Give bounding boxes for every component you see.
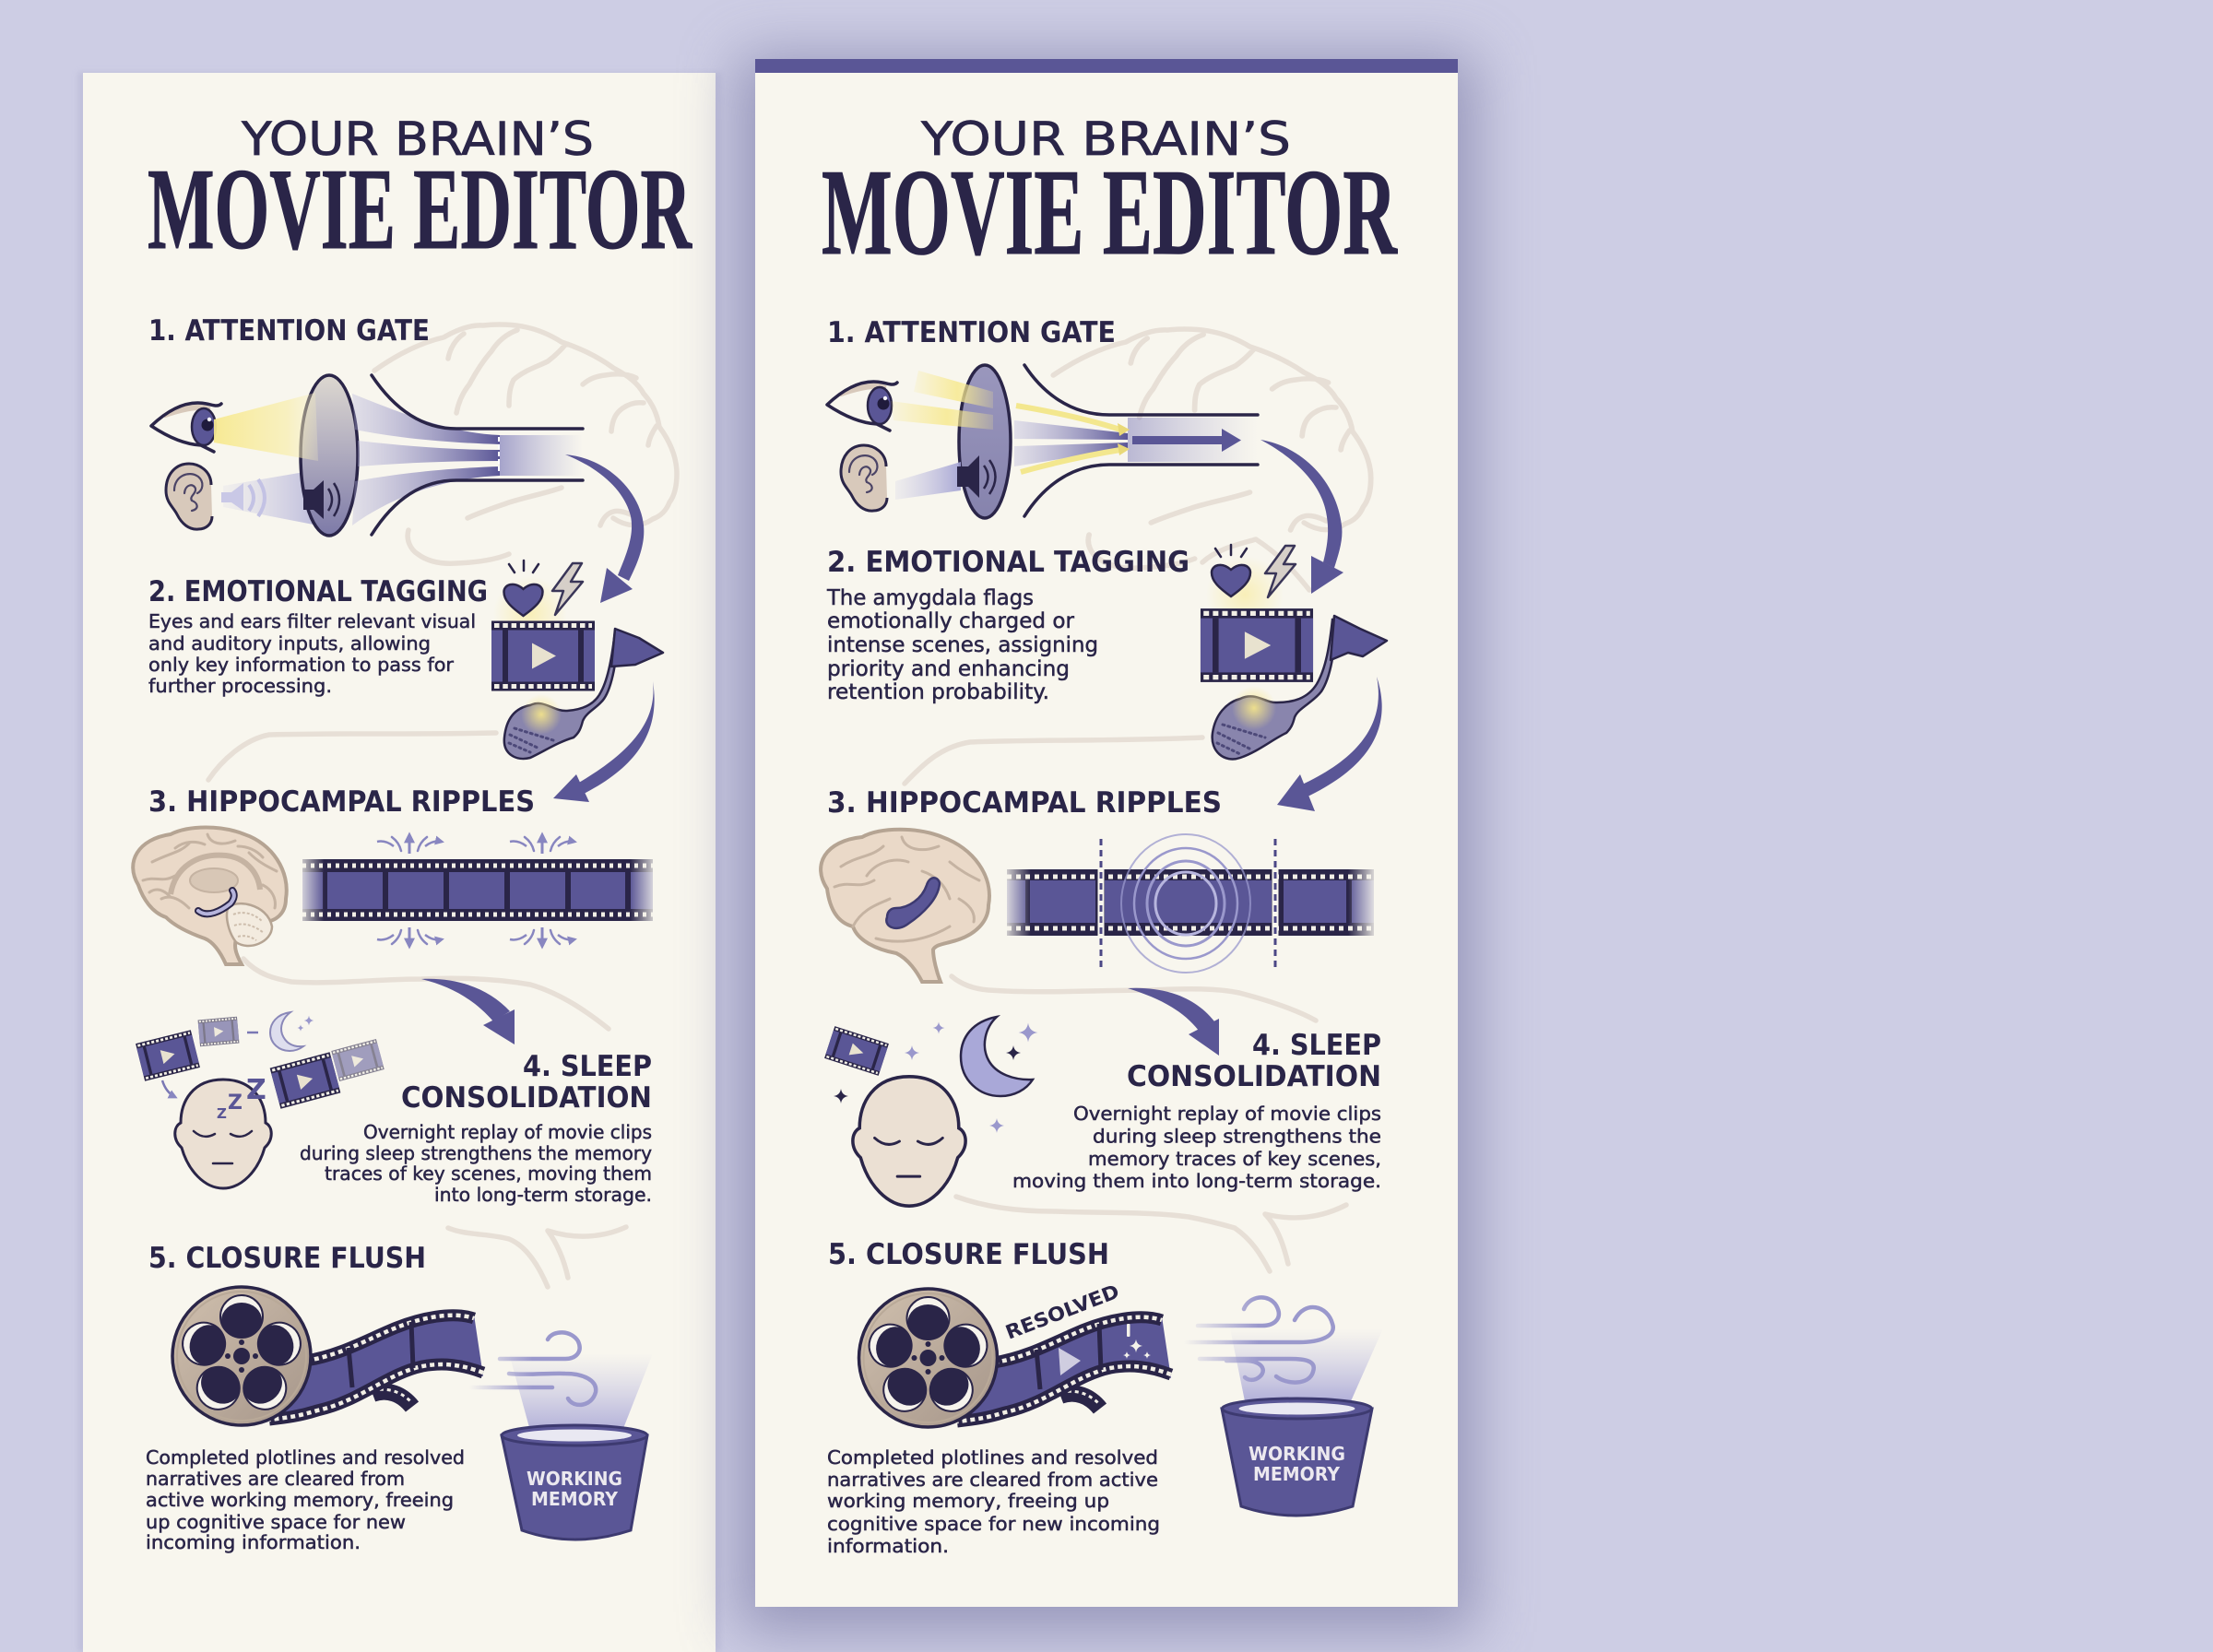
faint connector <box>243 959 609 1029</box>
heading: hippocampal ripples: 3. HIPPOCAMPAL RIPPLES <box>148 785 535 819</box>
stars <box>297 1016 314 1032</box>
text: closure body: narratives are cleared from <box>146 1468 405 1490</box>
funnel lines <box>1024 365 1258 516</box>
film ribbon <box>269 1313 483 1421</box>
heading: closure flush: 5. CLOSURE FLUSH <box>148 1242 426 1275</box>
icon: ear <box>841 445 887 511</box>
heading: sleep consolidation: CONSOLIDATION <box>1127 1060 1381 1093</box>
faint brain outline <box>1053 329 1371 590</box>
icon: film clip <box>824 1026 889 1076</box>
top accent bar <box>755 59 1458 73</box>
faint connector <box>956 1197 1346 1271</box>
icon: zzz <box>217 1074 266 1122</box>
icon: faded film clip <box>331 1039 385 1081</box>
sound beam <box>895 462 961 500</box>
text: sleep body: Overnight replay of movie clips <box>363 1121 652 1143</box>
icon: brain cross-section <box>133 828 287 964</box>
heading: sleep consolidation: CONSOLIDATION <box>401 1081 652 1115</box>
play mark <box>1059 1348 1081 1375</box>
bucket: working memory: WORKING <box>1249 1443 1345 1465</box>
arrow: tagging to ripples <box>553 681 655 802</box>
icon: zzz: Z <box>246 1074 266 1106</box>
funnel lines <box>372 375 583 535</box>
visual beam <box>214 393 318 461</box>
text: emotional tagging body: priority and enhancing <box>827 657 1070 681</box>
emotional tagging illustration <box>491 560 663 759</box>
attention gate illustration <box>151 375 583 536</box>
heart rays <box>509 560 538 572</box>
text: closure body: cognitive space for new incoming <box>827 1513 1160 1535</box>
icon: glow <box>1206 556 1284 633</box>
icon: amygdala <box>1213 620 1336 759</box>
bucket: working memory: MEMORY <box>531 1488 618 1510</box>
heading: sleep consolidation <box>401 1050 652 1115</box>
icon: faded film clip <box>198 1017 239 1046</box>
bucket: working memory: WORKING <box>527 1468 622 1490</box>
text: emotional tagging body <box>826 586 1098 704</box>
faint connector <box>208 733 496 780</box>
text: emotional tagging body: retention probability. <box>827 680 1049 704</box>
text: sleep body <box>300 1121 652 1206</box>
text: emotional tagging body: further processing. <box>148 675 332 697</box>
icon: film clip <box>270 1052 340 1109</box>
text: emotional tagging body: The amygdala flags <box>826 586 1034 610</box>
label: resolved: RESOLVED <box>1002 1280 1122 1344</box>
icon: sleeping head <box>175 1080 271 1188</box>
bucket: working memory <box>502 1425 647 1540</box>
left title: YOUR BRAIN’S <box>241 112 594 166</box>
icon: sleeping head <box>853 1077 965 1206</box>
icon: heart <box>1212 565 1250 596</box>
text: emotional tagging body: Eyes and ears filter relevant visual <box>148 610 476 632</box>
text: closure body: active working memory, freeing <box>146 1489 454 1511</box>
gate speaker <box>303 480 339 519</box>
arrow: ripples to sleep <box>1128 988 1219 1056</box>
icon: lightning bolt <box>1265 546 1296 597</box>
text: sleep body <box>1012 1103 1381 1192</box>
heading: attention gate: 1. ATTENTION GATE <box>148 314 430 348</box>
ripples above and below strip <box>377 835 574 946</box>
panel shadow <box>738 55 1475 1632</box>
film strip <box>1007 869 1374 936</box>
icon: flag <box>1331 616 1387 660</box>
light beam <box>1230 1328 1383 1401</box>
arrow: ripples to sleep <box>421 979 515 1044</box>
text: sleep body: Overnight replay of movie clips <box>1073 1103 1381 1125</box>
stars <box>834 1022 1037 1133</box>
film strip <box>302 859 653 921</box>
small sound speaker <box>221 479 265 516</box>
text: closure body <box>827 1446 1160 1557</box>
heading: emotional tagging: 2. EMOTIONAL TAGGING <box>827 546 1189 579</box>
icon: eye <box>827 382 897 431</box>
text: emotional tagging body: intense scenes, assigning <box>827 633 1098 657</box>
text: emotional tagging body: emotionally charged or <box>827 609 1075 633</box>
icon: amygdala <box>504 631 619 759</box>
text: sleep body: memory traces of key scenes, <box>1088 1148 1381 1170</box>
faint brain outline <box>374 324 677 563</box>
sound beam <box>223 472 318 525</box>
wind lines <box>1184 1297 1333 1383</box>
infographic canvas <box>79 26 1505 1652</box>
small arrows <box>162 1032 258 1097</box>
right title: YOUR BRAIN’S <box>920 112 1291 166</box>
sleep illustration <box>136 1012 385 1188</box>
heading: hippocampal ripples: 3. HIPPOCAMPAL RIPPLES <box>827 786 1222 820</box>
heading: attention gate: 1. ATTENTION GATE <box>827 316 1116 349</box>
text: closure body: narratives are cleared from active <box>827 1469 1158 1491</box>
text: sleep body: during sleep strengthens the memory <box>300 1142 652 1164</box>
emotional tagging illustration <box>1201 545 1387 759</box>
icon: brain side view <box>821 830 989 982</box>
faint connector <box>448 1227 626 1287</box>
icon: film frame <box>491 621 595 691</box>
icon: flag <box>611 629 663 667</box>
text: closure body: incoming information. <box>146 1531 361 1553</box>
icon: film clip <box>136 1030 200 1081</box>
text: closure body: Completed plotlines and resolved <box>827 1446 1158 1469</box>
gate ellipse <box>301 375 358 536</box>
text: closure body: up cognitive space for new <box>146 1511 406 1533</box>
icon: eye <box>151 403 221 452</box>
heading: sleep consolidation: 4. SLEEP <box>523 1050 652 1083</box>
icon: ear <box>166 464 212 529</box>
faint connector <box>952 976 1316 1021</box>
icon: moon <box>961 1017 1033 1096</box>
sparkles <box>1123 1324 1151 1359</box>
arrow: gate to tagging <box>1260 440 1343 594</box>
left title <box>148 112 692 274</box>
sleep illustration <box>824 1017 1037 1206</box>
wind and beam <box>469 1332 653 1431</box>
attention gate illustration <box>827 365 1258 518</box>
text: sleep body: traces of key scenes, moving them <box>325 1162 652 1185</box>
left title: MOVIE EDITOR <box>148 146 692 274</box>
right title: MOVIE EDITOR <box>822 144 1398 280</box>
heart rays <box>1215 545 1247 557</box>
arrow: gate to tagging <box>565 454 644 603</box>
icon: zzz: Z <box>217 1105 227 1122</box>
icon: heart <box>503 584 542 616</box>
icon: zzz: Z <box>228 1092 243 1115</box>
text: sleep body: during sleep strengthens the <box>1093 1125 1381 1147</box>
bucket: working memory: MEMORY <box>1253 1463 1340 1485</box>
panel: left draft poster <box>77 72 721 1652</box>
yellow rays <box>891 371 993 430</box>
text: closure body: information. <box>827 1535 949 1557</box>
wind lines <box>469 1332 596 1405</box>
gate ellipse <box>959 365 1011 518</box>
wind and beam <box>1184 1297 1383 1401</box>
text: sleep body: into long-term storage. <box>434 1184 652 1206</box>
text: emotional tagging body: only key information to pass for <box>148 654 455 676</box>
text: emotional tagging body <box>148 610 476 697</box>
icon: film reel <box>172 1287 311 1425</box>
light beam <box>509 1353 653 1431</box>
attention streams <box>352 394 583 525</box>
bucket: working memory <box>1222 1398 1372 1516</box>
film ribbon <box>957 1315 1171 1422</box>
ripple rings <box>1121 834 1250 973</box>
icon: film reel <box>859 1289 998 1427</box>
faint connector <box>905 738 1202 784</box>
heading: emotional tagging: 2. EMOTIONAL TAGGING <box>148 575 488 608</box>
cut lines <box>1101 839 1275 967</box>
heading: sleep consolidation: 4. SLEEP <box>1252 1029 1381 1062</box>
text: closure body: working memory, freeing up <box>827 1490 1109 1512</box>
text: closure body: Completed plotlines and resolved <box>146 1446 465 1469</box>
right title <box>822 112 1398 280</box>
icon: glow <box>493 576 567 650</box>
attention streams <box>1014 406 1258 472</box>
icon: film frame <box>1201 608 1313 682</box>
text: sleep body: moving them into long-term storage. <box>1012 1170 1381 1192</box>
heading: sleep consolidation <box>1127 1029 1381 1093</box>
panel: right final poster <box>755 59 1458 1607</box>
text: closure body <box>146 1446 465 1553</box>
text: emotional tagging body: and auditory inputs, allowing <box>148 632 431 655</box>
arrow: tagging to ripples <box>1277 677 1382 811</box>
gate speaker <box>957 455 996 498</box>
icon: moon <box>270 1012 303 1051</box>
heading: closure flush: 5. CLOSURE FLUSH <box>828 1238 1109 1271</box>
icon: lightning bolt <box>552 563 583 615</box>
